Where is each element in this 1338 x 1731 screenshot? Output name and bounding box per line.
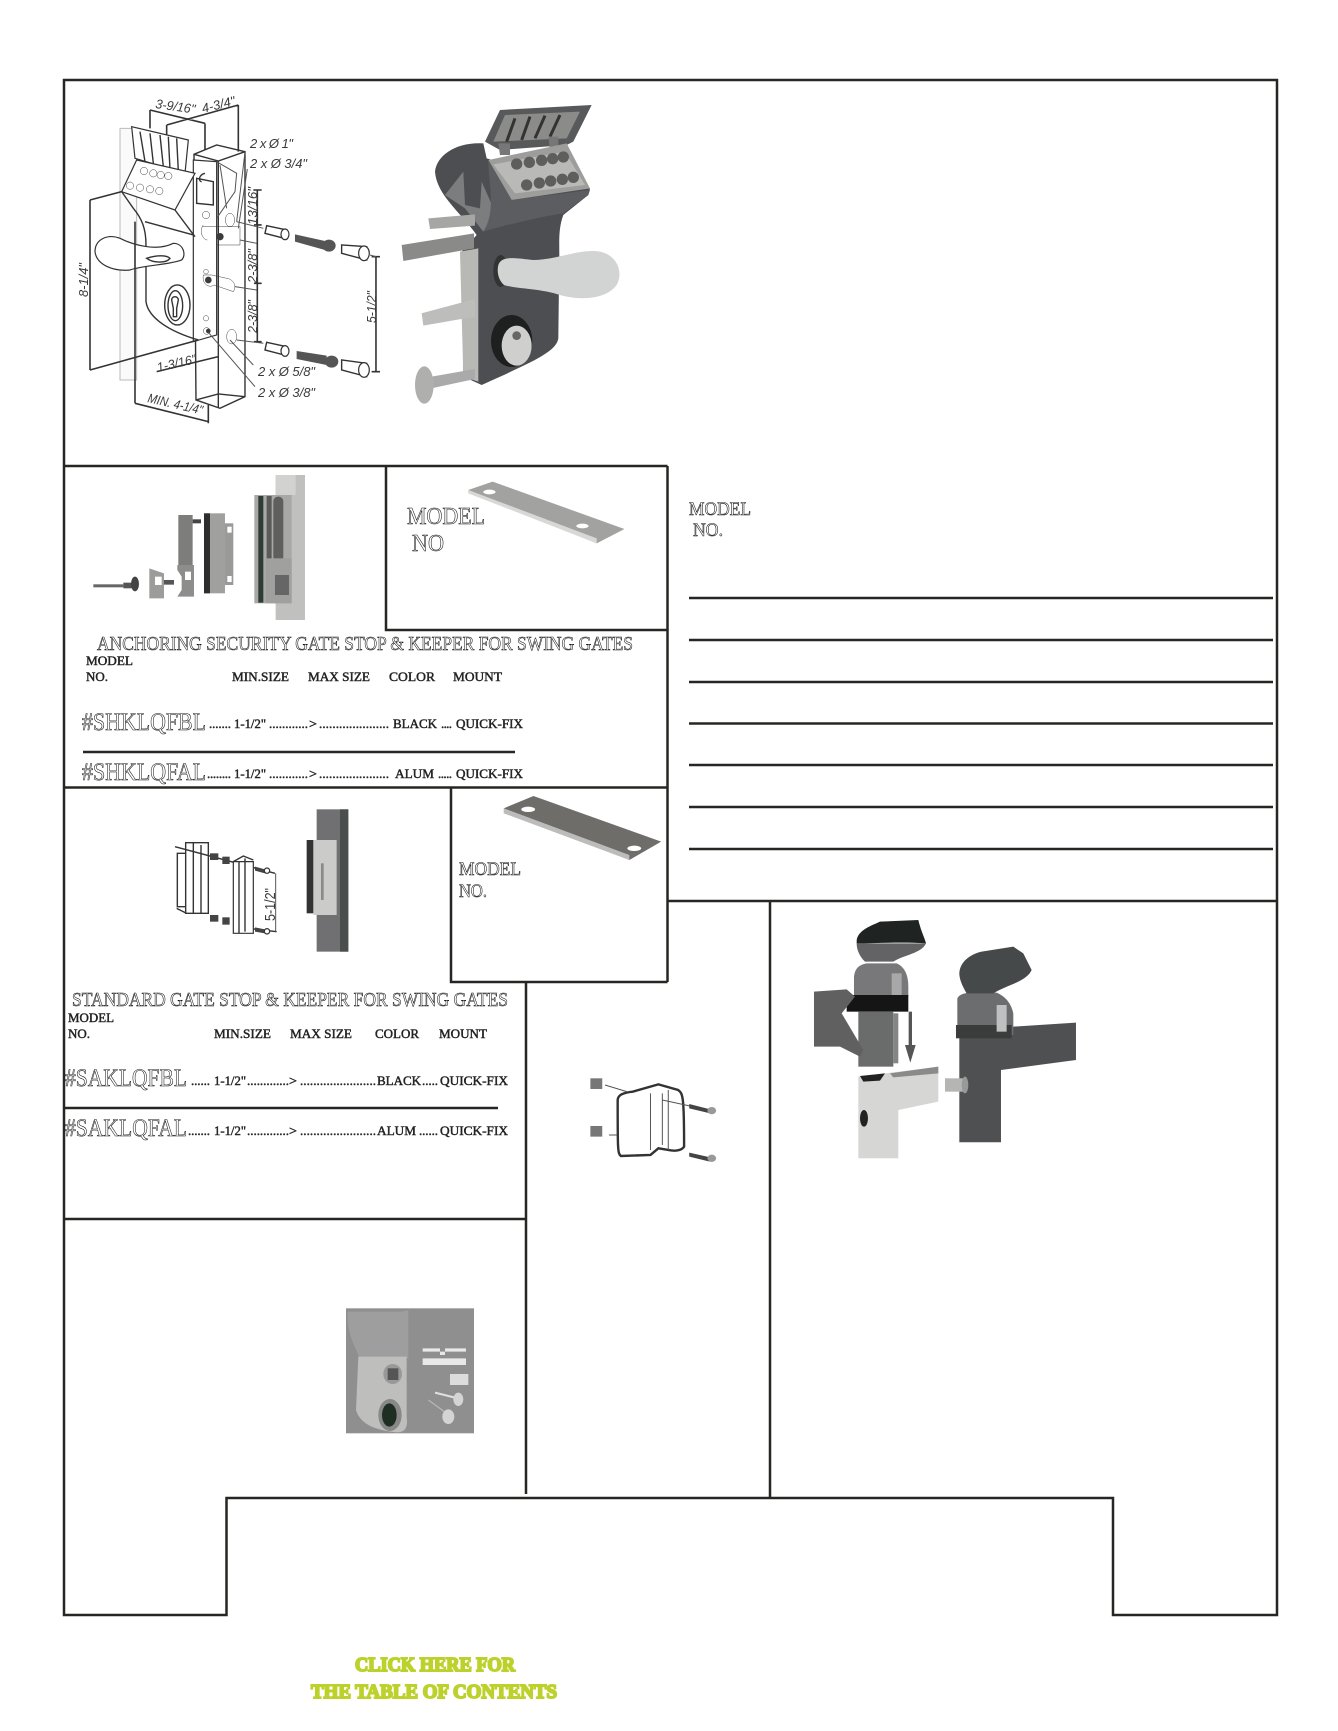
standard table: ...... xyxy=(419,1123,438,1138)
anchoring table: #SHKLQFBL xyxy=(82,709,206,736)
standard table: MODEL xyxy=(68,1010,114,1025)
anchoring table: NO. xyxy=(86,669,108,684)
standard keeper dimension: 5-1/2" xyxy=(262,888,279,921)
model label: NO. xyxy=(693,520,723,541)
dimension labels: 4-3/4" xyxy=(200,93,238,116)
dimension labels: 2-3/8" xyxy=(245,248,260,284)
dimension labels: 1-3/16" xyxy=(155,351,199,375)
bar model label: NO xyxy=(412,531,444,557)
anchoring table: MODEL xyxy=(86,653,133,668)
standard table: QUICK-FIX xyxy=(440,1073,509,1088)
cylinder kit photo xyxy=(346,1308,474,1433)
anchoring table: QUICK-FIX xyxy=(456,766,524,781)
flat bar xyxy=(504,796,661,860)
standard table: MAX SIZE xyxy=(290,1026,352,1041)
standard table: MIN.SIZE xyxy=(214,1026,271,1041)
model label xyxy=(689,499,751,541)
standard keeper photo xyxy=(307,809,348,952)
standard table: ............. xyxy=(247,1123,289,1138)
dimension labels: 5-1/2" xyxy=(364,290,379,323)
standard table: 1-1/2" xyxy=(214,1073,246,1088)
anchoring table: COLOR xyxy=(389,669,435,684)
mounting bar xyxy=(468,482,624,543)
panel: standard gate stop and keeper xyxy=(65,796,661,1142)
standard table: ..... xyxy=(422,1073,438,1088)
photo: light frame post xyxy=(858,1067,938,1158)
standard table xyxy=(65,1010,509,1142)
standard table: QUICK-FIX xyxy=(440,1123,509,1138)
link: table of contents: THE TABLE OF CONTENTS xyxy=(311,1681,557,1703)
dimension labels: 13/16" xyxy=(245,186,260,225)
small keeper diagram xyxy=(590,1078,716,1162)
lock product photo xyxy=(402,105,619,404)
panel: top lock images xyxy=(76,93,619,423)
anchoring table: #SHKLQFAL xyxy=(82,759,206,786)
anchoring table: ..... xyxy=(438,766,452,781)
bar model label xyxy=(407,504,485,557)
anchoring keeper photo xyxy=(93,475,305,620)
anchoring table: 1-1/2" xyxy=(234,766,266,781)
panel: anchoring gate stop and keeper xyxy=(82,475,633,786)
anchoring heading: ANCHORING SECURITY GATE STOP & KEEPER FOR SWING GATES xyxy=(97,633,633,655)
anchoring table: MAX SIZE xyxy=(308,669,370,684)
standard table: ....................... xyxy=(300,1123,376,1138)
standard table: COLOR xyxy=(375,1026,419,1041)
dimension labels: MIN. 4-1/4" xyxy=(146,390,205,418)
anchoring table xyxy=(82,653,524,786)
dimension labels: 2 x Ø 3/4" xyxy=(249,156,308,171)
anchoring table: > xyxy=(309,766,317,781)
standard table: ....................... xyxy=(300,1073,376,1088)
photo: installed cap xyxy=(945,947,1076,1142)
anchoring table: MIN.SIZE xyxy=(232,669,289,684)
standard table: #SAKLQFBL xyxy=(65,1065,187,1092)
anchoring table: QUICK-FIX xyxy=(456,716,524,731)
dimension labels: 8-1/4" xyxy=(76,262,91,297)
standard table: ...... xyxy=(191,1073,210,1088)
standard table: #SAKLQFAL xyxy=(65,1115,187,1142)
standard table: NO. xyxy=(68,1026,90,1041)
list rules xyxy=(689,598,1273,849)
standard table: BLACK xyxy=(377,1073,422,1088)
post cap lock photos xyxy=(814,920,1076,1158)
dimension labels: 2 x Ø 3/8" xyxy=(257,385,316,400)
standard table: ....... xyxy=(188,1123,210,1138)
anchoring table: BLACK xyxy=(393,716,438,731)
anchoring table: MOUNT xyxy=(453,669,502,684)
standard table: ............. xyxy=(247,1073,289,1088)
anchoring table: ............ xyxy=(269,716,308,731)
dimension labels: 3-9/16" xyxy=(155,96,198,117)
dimension labels: 2 x Ø 1" xyxy=(249,136,294,151)
anchoring table: ........ xyxy=(207,766,231,781)
anchoring table: .... xyxy=(441,716,452,731)
anchoring table: 1-1/2" xyxy=(234,716,266,731)
anchoring table: > xyxy=(309,716,317,731)
standard table: > xyxy=(289,1073,297,1088)
anchoring table: ..................... xyxy=(319,766,389,781)
dimension labels xyxy=(76,93,379,418)
standard table: > xyxy=(289,1123,297,1138)
flat bar model label xyxy=(459,859,521,902)
panel: right model list xyxy=(689,499,1273,849)
standard table: MOUNT xyxy=(439,1026,487,1041)
link: table of contents xyxy=(311,1654,557,1703)
anchoring table: ..................... xyxy=(319,716,389,731)
flat bar model label: NO. xyxy=(459,881,487,902)
anchoring table: ............ xyxy=(269,766,308,781)
model label: MODEL xyxy=(689,499,751,520)
standard table: 1-1/2" xyxy=(214,1123,246,1138)
flat bar model label: MODEL xyxy=(459,859,521,880)
bar model label: MODEL xyxy=(407,504,485,530)
lock dimension diagram xyxy=(76,93,380,423)
photo: cap being fitted xyxy=(814,920,938,1158)
standard keeper diagram xyxy=(175,843,279,934)
dimension labels: 2-3/8" xyxy=(245,299,260,334)
dimension labels: 2 x Ø 5/8" xyxy=(257,364,316,379)
anchoring table: ALUM xyxy=(395,766,434,781)
standard heading: STANDARD GATE STOP & KEEPER FOR SWING GATES xyxy=(72,989,508,1011)
link: table of contents: CLICK HERE FOR xyxy=(355,1654,516,1676)
anchoring table: ....... xyxy=(209,716,231,731)
standard table: ALUM xyxy=(377,1123,416,1138)
